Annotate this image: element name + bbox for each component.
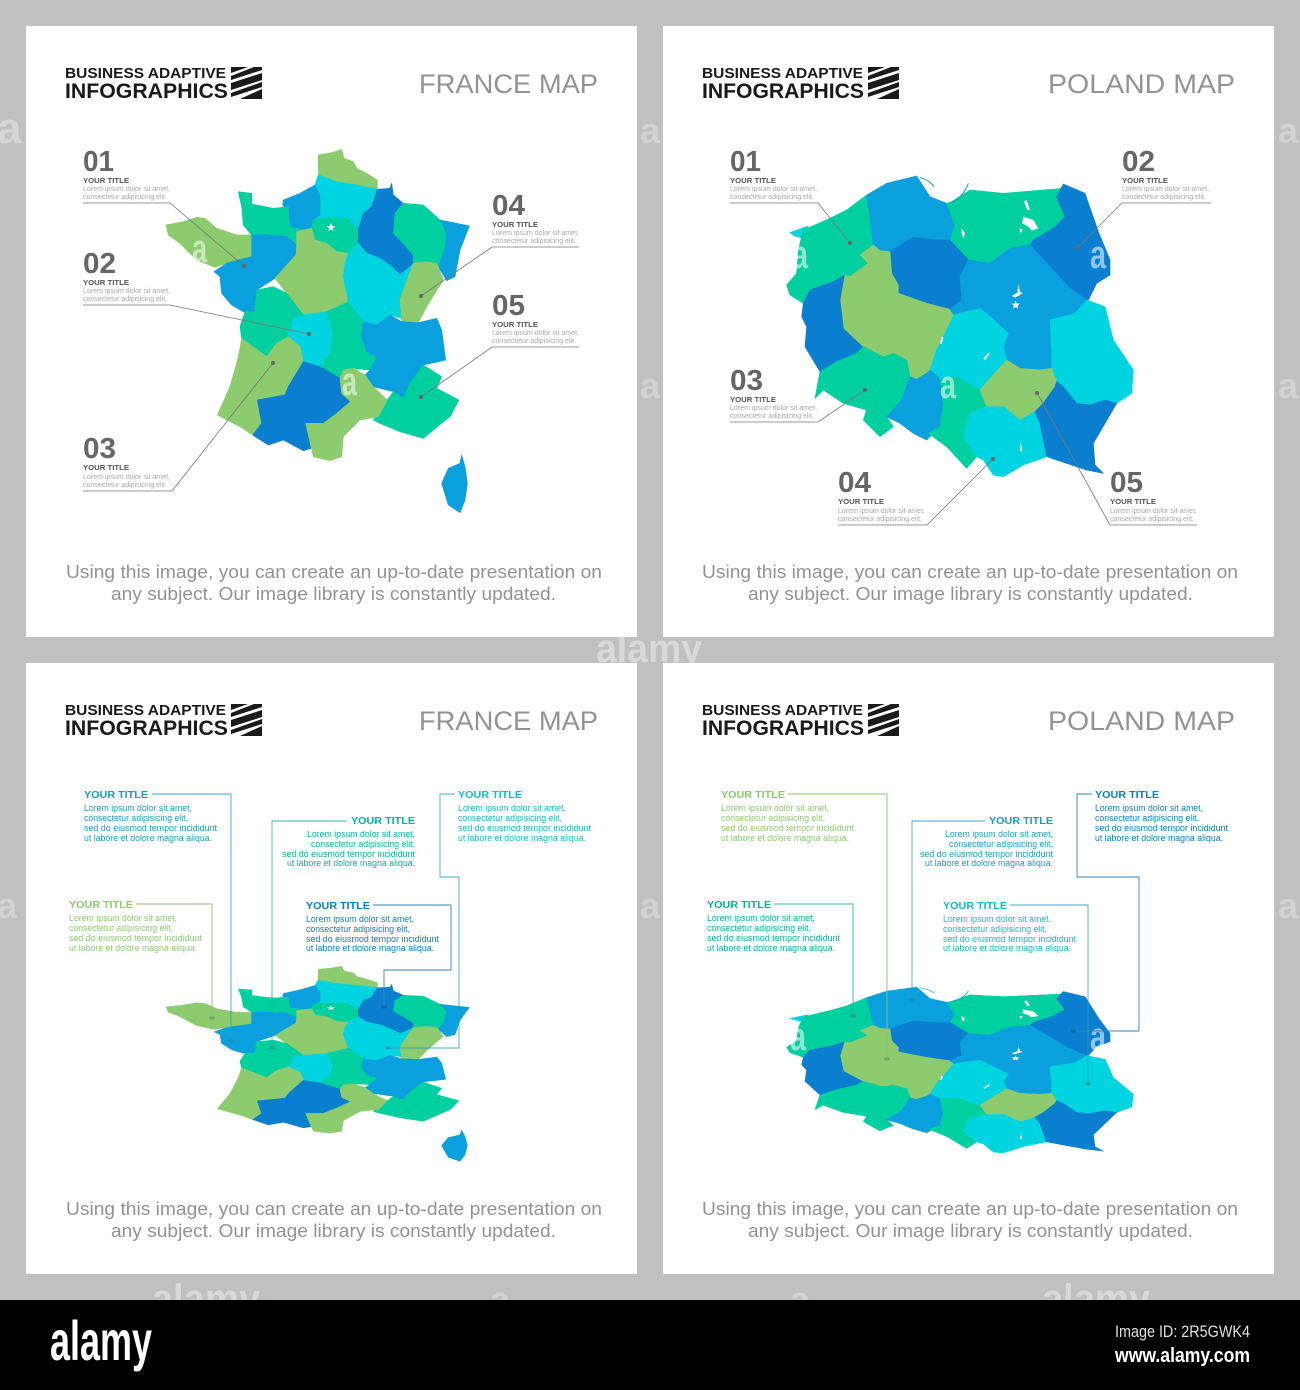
- text block with leader: centre top: YOUR TITLE: [989, 815, 1053, 827]
- text block with leader: top left: sed do eiusmod tempor incididunt: [721, 823, 854, 833]
- text block with leader: lower left: [69, 899, 215, 1020]
- watermark on map: a: [940, 363, 957, 407]
- text block with leader: top right: YOUR TITLE: [458, 789, 522, 801]
- callout 03: 03: [83, 433, 116, 465]
- text block with leader: top right: [1070, 789, 1228, 1033]
- heading: FRANCE MAP: [419, 706, 598, 736]
- callout 04: [838, 457, 995, 525]
- callout 01: consectetur adipisicing elit.: [730, 194, 814, 201]
- callout 03: [730, 365, 867, 422]
- website: www.alamy.com: [1114, 1345, 1250, 1367]
- callout 05: consectetur adipisicing elit.: [1110, 516, 1194, 523]
- text block with leader: centre top: ut labore et dolore magna aliqua.: [287, 858, 415, 868]
- callout 04: Lorem ipsum dolor sit amet,: [492, 230, 579, 237]
- watermark on map: [792, 233, 1107, 407]
- text block with leader: top left: [84, 789, 234, 1043]
- watermark on map: a: [192, 227, 208, 271]
- panel: France map flattened: [26, 663, 637, 1274]
- callout 02: [83, 248, 311, 336]
- logo: BUSINESS ADAPTIVE: [65, 66, 226, 82]
- logo: BUSINESS ADAPTIVE: [65, 703, 226, 719]
- callout 05: [419, 290, 579, 399]
- callout 04: YOUR TITLE: [492, 220, 538, 229]
- callout 02: 02: [1122, 146, 1155, 178]
- watermark letters on background: alamy: [1042, 1277, 1151, 1321]
- description text: [66, 561, 602, 604]
- text block with leader: lower left: sed do eiusmod tempor incididunt: [707, 933, 840, 943]
- description text: any subject. Our image library is constantly updated.: [748, 583, 1193, 604]
- logo: INFOGRAPHICS: [702, 80, 864, 103]
- description text: any subject. Our image library is constantly updated.: [748, 1220, 1193, 1241]
- callout 01: [730, 146, 852, 245]
- text block with leader: top right: ut labore et dolore magna aliqua.: [458, 833, 586, 843]
- text block with leader: centre top: sed do eiusmod tempor incididunt: [920, 849, 1053, 859]
- logo: BUSINESS ADAPTIVE: [702, 66, 863, 82]
- description text: [702, 1198, 1238, 1241]
- heading: POLAND MAP: [1048, 69, 1235, 99]
- callout 02: 02: [83, 248, 116, 280]
- text block with leader: top left: consectetur adipisicing elit,: [721, 813, 825, 823]
- watermark on map: a: [790, 1015, 807, 1059]
- text block with leader: lower left: ut labore et dolore magna aliqua.: [707, 943, 835, 953]
- text block with leader: top left: YOUR TITLE: [84, 789, 148, 801]
- watermark letters on background: a: [640, 885, 661, 926]
- text block with leader: centre lower: YOUR TITLE: [306, 900, 370, 912]
- text block with leader: top right: Lorem ipsum dolor sit amet,: [458, 803, 566, 813]
- callout 04: 04: [838, 467, 871, 499]
- map: France regions: [166, 149, 469, 513]
- text block with leader: top right: consectetur adipisicing elit,: [458, 813, 562, 823]
- text block with leader: lower left: consectetur adipisicing elit,: [69, 923, 173, 933]
- text block with leader: centre top: [909, 815, 1053, 1002]
- callout 01: 01: [730, 146, 761, 178]
- text block with leader: centre top: Lorem ipsum dolor sit amet,: [307, 829, 415, 839]
- text block with leader: top right: ut labore et dolore magna aliqua.: [1095, 833, 1223, 843]
- text block with leader: centre top: consectetur adipisicing elit,: [949, 839, 1053, 849]
- callout 01: [83, 146, 246, 268]
- callout 05: [1035, 391, 1197, 525]
- text block with leader: centre lower: Lorem ipsum dolor sit amet,: [943, 914, 1051, 924]
- text block with leader: centre lower: ut labore et dolore magna aliqua.: [306, 943, 434, 953]
- callout 02: consectetur adipisicing elit.: [83, 296, 167, 303]
- heading: POLAND MAP: [1048, 706, 1235, 736]
- text block with leader: top left: ut labore et dolore magna aliqua.: [84, 833, 212, 843]
- callout 04: [419, 190, 579, 298]
- logo: INFOGRAPHICS: [65, 80, 228, 103]
- text block with leader: top left: sed do eiusmod tempor incididunt: [84, 823, 217, 833]
- watermark letters on background: a: [490, 1279, 511, 1320]
- map: Poland regions: [787, 176, 1133, 477]
- callout 02: Lorem ipsum dolor sit amet,: [83, 288, 170, 295]
- text block with leader: centre top: [269, 815, 415, 1050]
- watermark letters on background: a: [640, 365, 661, 406]
- panel: France map numbered: [26, 26, 637, 637]
- heading: FRANCE MAP: [419, 69, 598, 99]
- text block with leader: lower left: Lorem ipsum dolor sit amet,: [707, 913, 815, 923]
- text block with leader: top left: Lorem ipsum dolor sit amet,: [721, 803, 829, 813]
- callout 03: YOUR TITLE: [730, 395, 776, 404]
- callout 01: Lorem ipsum dolor sit amet,: [730, 186, 817, 193]
- callout 05: YOUR TITLE: [1110, 497, 1156, 506]
- text block with leader: top left: [721, 789, 890, 1061]
- callout 05: Lorem ipsum dolor sit amet,: [492, 330, 579, 337]
- callout 05: 05: [1110, 467, 1143, 499]
- callout 03: consectetur adipisicing elit.: [730, 413, 814, 420]
- text block with leader: lower left: consectetur adipisicing elit,: [707, 923, 811, 933]
- watermark letters on background: a: [790, 1279, 811, 1320]
- callout 01: consectetur adipisicing elit.: [83, 194, 167, 201]
- text block with leader: centre top: YOUR TITLE: [351, 815, 415, 827]
- text block with leader: centre lower: sed do eiusmod tempor incididunt: [306, 934, 439, 944]
- description text: [66, 1198, 602, 1241]
- logo: BUSINESS ADAPTIVE: [702, 703, 863, 719]
- text block with leader: centre top: sed do eiusmod tempor incididunt: [282, 849, 415, 859]
- text block with leader: top right: Lorem ipsum dolor sit amet,: [1095, 803, 1203, 813]
- callout 04: consectetur adipisicing elit.: [838, 516, 922, 523]
- footer logo: alamy: [50, 1309, 152, 1372]
- text block with leader: lower left: YOUR TITLE: [707, 899, 771, 911]
- callout 02: Lorem ipsum dolor sit amet,: [1122, 186, 1209, 193]
- callout 03: 03: [730, 365, 763, 397]
- callout 04: consectetur adipisicing elit.: [492, 238, 576, 245]
- text block with leader: centre lower: Lorem ipsum dolor sit amet,: [306, 914, 414, 924]
- text block with leader: top right: YOUR TITLE: [1095, 789, 1159, 801]
- callout 02: [1075, 146, 1211, 250]
- logo: [65, 703, 262, 740]
- callout 05: consectetur adipisicing elit.: [492, 338, 576, 345]
- callout 03: Lorem ipsum dolor sit amet,: [730, 405, 817, 412]
- watermark on map: a: [1090, 1015, 1107, 1059]
- text block with leader: top right: sed do eiusmod tempor incididunt: [458, 823, 591, 833]
- callout 02: YOUR TITLE: [83, 278, 129, 287]
- text block with leader: top left: consectetur adipisicing elit,: [84, 813, 188, 823]
- description text: [702, 561, 1238, 604]
- callout 05: YOUR TITLE: [492, 320, 538, 329]
- watermark on map: [192, 227, 358, 404]
- callout 03: Lorem ipsum dolor sit amet,: [83, 474, 170, 481]
- text block with leader: top left: ut labore et dolore magna aliqua.: [721, 833, 849, 843]
- logo: INFOGRAPHICS: [65, 717, 228, 740]
- watermark on map: a: [792, 233, 809, 277]
- callout 03: YOUR TITLE: [83, 463, 129, 472]
- text block with leader: lower left: ut labore et dolore magna aliqua.: [69, 943, 197, 953]
- text block with leader: top right: [385, 789, 591, 1050]
- panel: Poland map numbered: [663, 26, 1274, 637]
- logo: [702, 66, 899, 103]
- map: France perspective: [166, 966, 469, 1161]
- text block with leader: lower left: sed do eiusmod tempor incididunt: [69, 933, 202, 943]
- callout 04: 04: [492, 190, 525, 222]
- callout 05: Lorem ipsum dolor sit amet,: [1110, 508, 1197, 515]
- map: Poland perspective: [787, 987, 1133, 1153]
- watermark letters on background: alamy: [152, 1277, 261, 1321]
- callout 01: Lorem ipsum dolor sit amet,: [83, 186, 170, 193]
- text block with leader: centre lower: YOUR TITLE: [943, 900, 1007, 912]
- description text: any subject. Our image library is constantly updated.: [111, 1220, 556, 1241]
- callout 03: [83, 361, 275, 491]
- text block with leader: centre lower: [943, 900, 1091, 1086]
- watermark on map: a: [342, 360, 358, 404]
- text block with leader: centre lower: consectetur adipisicing elit,: [306, 924, 410, 934]
- text block with leader: top right: sed do eiusmod tempor incididunt: [1095, 823, 1228, 833]
- watermark letters on background: alamy: [596, 627, 703, 671]
- text block with leader: centre top: Lorem ipsum dolor sit amet,: [945, 829, 1053, 839]
- text block with leader: centre top: consectetur adipisicing elit,: [311, 839, 415, 849]
- description text: Using this image, you can create an up-to-date presentation on: [702, 561, 1238, 582]
- logo: [702, 703, 899, 740]
- text block with leader: centre lower: consectetur adipisicing elit,: [943, 924, 1047, 934]
- callout 04: YOUR TITLE: [838, 497, 884, 506]
- callout 05: 05: [492, 290, 525, 322]
- description text: Using this image, you can create an up-to-date presentation on: [66, 1198, 602, 1219]
- text block with leader: lower left: YOUR TITLE: [69, 899, 133, 911]
- watermark on map: a: [1090, 233, 1107, 277]
- callout 01: YOUR TITLE: [83, 176, 129, 185]
- callout 01: 01: [83, 146, 114, 178]
- watermark letters on background: a: [1278, 885, 1299, 926]
- text block with leader: centre top: ut labore et dolore magna aliqua.: [925, 858, 1053, 868]
- description text: Using this image, you can create an up-to-date presentation on: [66, 561, 602, 582]
- logo: [65, 66, 262, 103]
- text block with leader: centre lower: [306, 900, 451, 1009]
- callout 03: consectetur adipisicing elit.: [83, 482, 167, 489]
- callout 02: consectetur adipisicing elit.: [1122, 194, 1206, 201]
- description text: Using this image, you can create an up-to-date presentation on: [702, 1198, 1238, 1219]
- text block with leader: lower left: Lorem ipsum dolor sit amet,: [69, 913, 177, 923]
- image id: Image ID: 2R5GWK4: [1115, 1322, 1250, 1341]
- logo: INFOGRAPHICS: [702, 717, 864, 740]
- watermark letters on background: a: [640, 110, 661, 151]
- text block with leader: lower left: [707, 899, 856, 1018]
- footer bar: [0, 1300, 1300, 1390]
- callout 04: Lorem ipsum dolor sit amet,: [838, 508, 925, 515]
- text block with leader: top left: YOUR TITLE: [721, 789, 785, 801]
- text block with leader: centre lower: sed do eiusmod tempor incididunt: [943, 934, 1076, 944]
- callout 02: YOUR TITLE: [1122, 176, 1168, 185]
- callout 01: YOUR TITLE: [730, 176, 776, 185]
- watermark letters on background: a: [1278, 365, 1299, 406]
- text block with leader: centre lower: ut labore et dolore magna aliqua.: [943, 943, 1071, 953]
- watermark on map: [790, 1015, 1107, 1059]
- panel: Poland map flattened: [663, 663, 1274, 1274]
- watermark letters on background: a: [1278, 110, 1299, 151]
- text block with leader: top right: consectetur adipisicing elit,: [1095, 813, 1199, 823]
- text block with leader: top left: Lorem ipsum dolor sit amet,: [84, 803, 192, 813]
- description text: any subject. Our image library is constantly updated.: [111, 583, 556, 604]
